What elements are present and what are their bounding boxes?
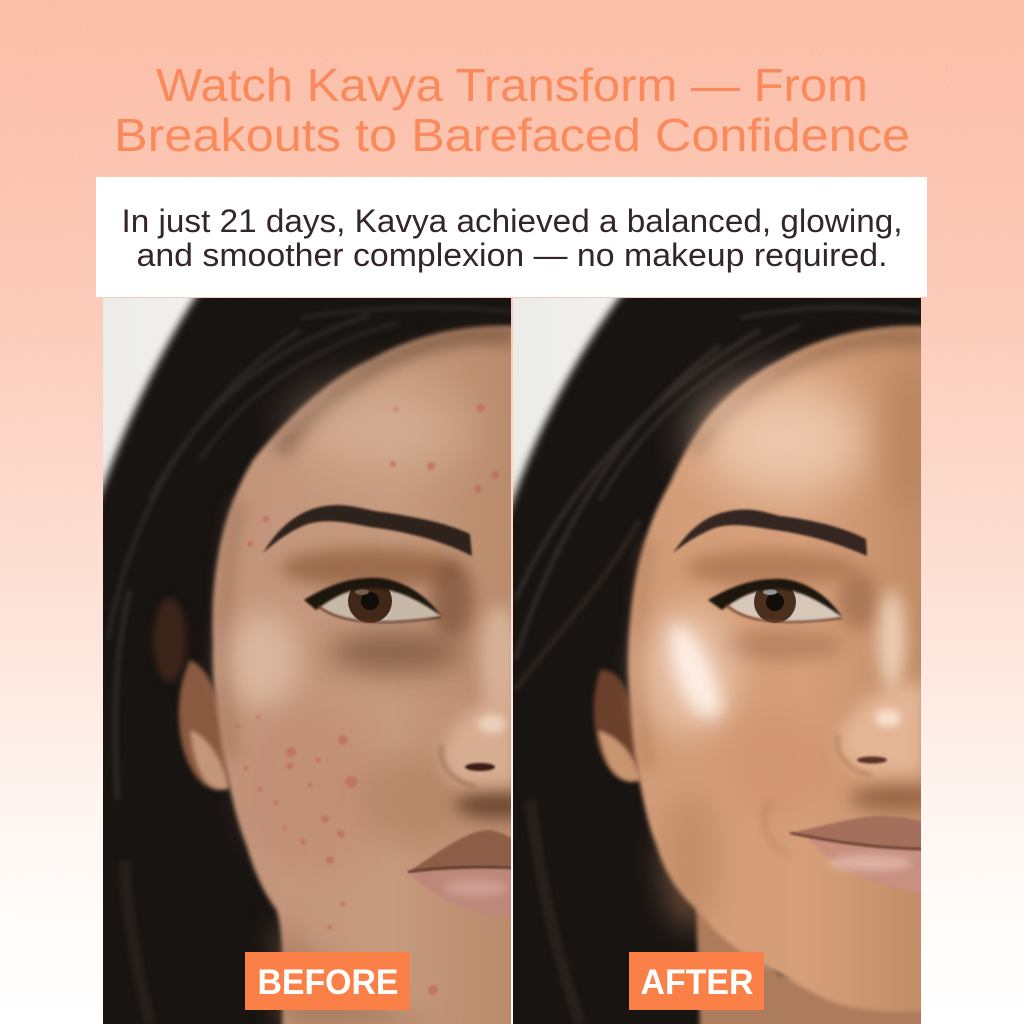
title: Watch Kavya Transform — From xyxy=(156,59,868,111)
label: before: BEFORE xyxy=(258,963,398,1002)
photo illustration: before xyxy=(95,290,535,1024)
face xyxy=(628,326,940,1012)
label: after: AFTER xyxy=(640,963,754,1002)
eyebrow xyxy=(673,510,867,556)
subtitle panel: and smoother complexion — no makeup required. xyxy=(136,237,888,273)
hair strands xyxy=(108,307,511,1024)
label: after xyxy=(629,952,764,1010)
nose xyxy=(439,700,511,829)
eye xyxy=(708,579,842,623)
lips xyxy=(408,830,515,918)
hair strands xyxy=(515,307,921,1024)
ear xyxy=(154,598,229,789)
ear xyxy=(594,670,641,781)
acne spots xyxy=(236,404,499,995)
title xyxy=(114,59,910,161)
label: before xyxy=(245,952,410,1010)
nose xyxy=(836,585,921,816)
eyebrow xyxy=(263,505,472,556)
face xyxy=(213,326,520,1024)
title: Breakouts to Barefaced Confidence xyxy=(114,109,910,161)
eye xyxy=(304,578,441,623)
subtitle panel: In just 21 days, Kavya achieved a balanced, glowing, xyxy=(122,203,902,239)
subtitle panel xyxy=(96,177,927,297)
lips xyxy=(764,800,925,893)
photo illustration: after xyxy=(505,290,940,1024)
neck xyxy=(696,905,925,1024)
